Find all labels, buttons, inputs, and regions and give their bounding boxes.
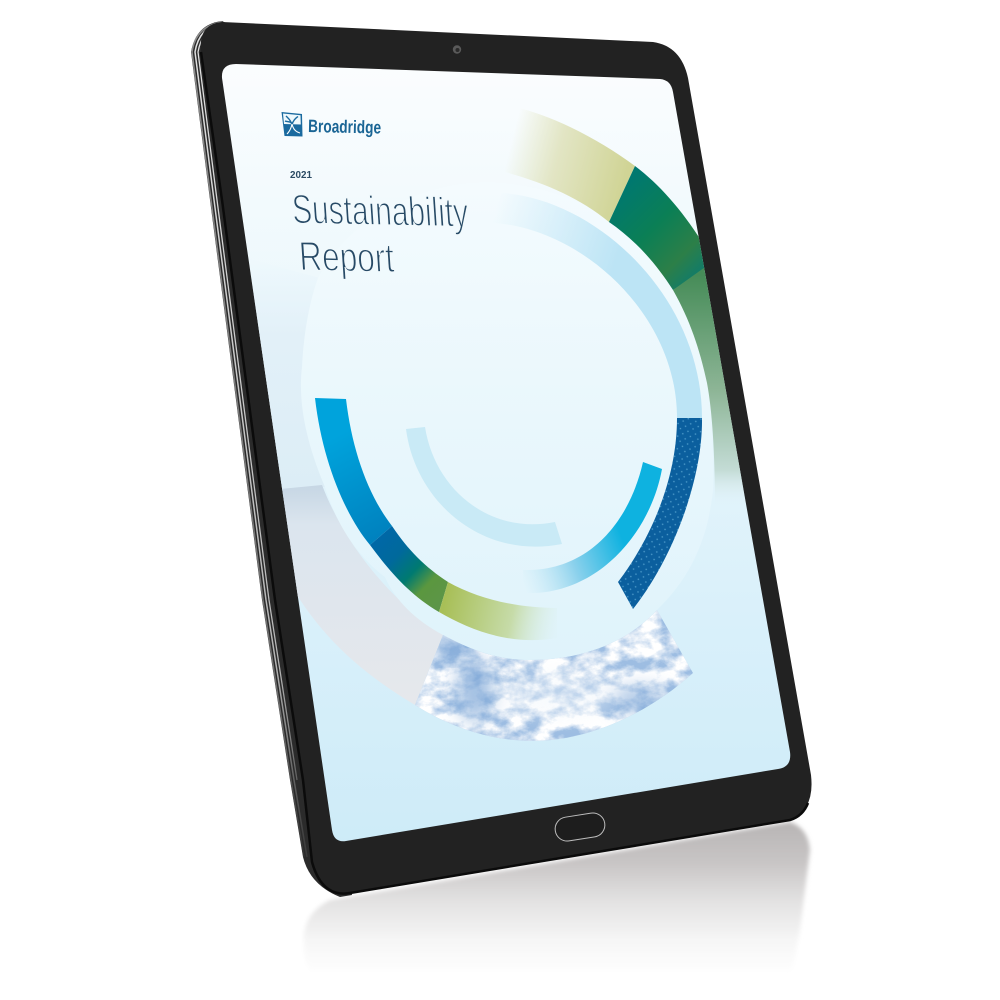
screen bbox=[222, 64, 790, 842]
ghost panel upper left bbox=[250, 270, 304, 490]
logo wordmark: Broadridge bbox=[308, 116, 381, 138]
title line two: Report bbox=[298, 233, 396, 281]
olive arc segment top bbox=[505, 105, 635, 222]
inner cyan arc bbox=[523, 462, 662, 593]
year label: 2021 bbox=[290, 170, 312, 181]
side rim bbox=[191, 21, 352, 897]
pale blue arc bbox=[512, 196, 702, 418]
cloud texture bbox=[415, 610, 691, 741]
logo mark bbox=[282, 112, 302, 136]
silver rim highlight bbox=[195, 23, 307, 857]
black edge line bbox=[201, 52, 808, 894]
grey rim highlight bbox=[192, 22, 304, 857]
report title bbox=[291, 186, 470, 281]
dotted dark blue arc bbox=[618, 418, 702, 609]
title line one: Sustainability bbox=[291, 186, 470, 236]
cloud shade lower left bbox=[457, 658, 493, 722]
cloud bright centre bbox=[500, 673, 620, 717]
inner pale arc bbox=[406, 427, 562, 547]
home button bbox=[553, 811, 607, 843]
faded sky ring segment bbox=[270, 485, 443, 705]
green arc segment top right bbox=[609, 166, 708, 290]
cloud shade top left bbox=[428, 638, 472, 658]
blue arc segment bbox=[315, 398, 392, 545]
cloud arc segment bbox=[415, 610, 693, 741]
reflection shadow bbox=[304, 822, 810, 972]
cloud base colour bbox=[415, 610, 693, 741]
olive arc segment bottom bbox=[439, 582, 557, 640]
camera bbox=[453, 45, 461, 54]
second silver rim line bbox=[198, 24, 297, 780]
tablet front bezel bbox=[201, 22, 812, 894]
blue to green arc segment bbox=[370, 526, 448, 612]
tablet device bbox=[191, 21, 812, 897]
cloud shade lower right bbox=[610, 686, 670, 714]
fading green arc bbox=[673, 268, 745, 498]
logo bbox=[282, 112, 381, 138]
screen background bbox=[222, 64, 790, 842]
light central disc bbox=[301, 306, 440, 634]
